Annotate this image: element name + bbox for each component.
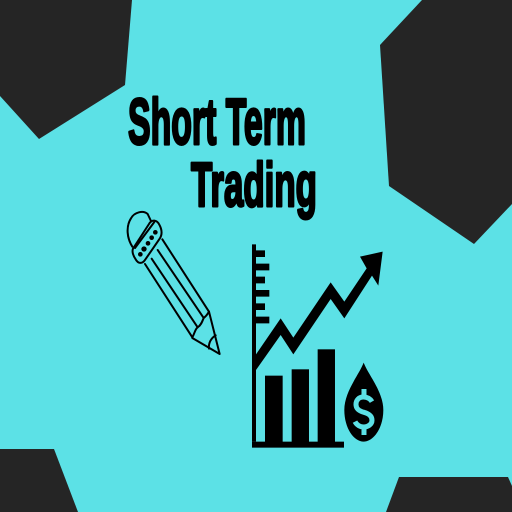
dark shape: bottom left <box>0 449 78 512</box>
pencil eraser <box>128 212 151 247</box>
dark shape: bottom right <box>386 477 512 512</box>
trend arrow <box>256 252 383 370</box>
bar 1 <box>265 376 283 442</box>
dark shape: top left <box>0 0 132 139</box>
icon: dollar drop <box>344 363 383 442</box>
pencil point <box>209 335 216 349</box>
pencil ferrule <box>132 221 162 263</box>
title line 1: Short Term <box>128 85 306 158</box>
dark shape: top right <box>380 0 512 244</box>
icon: growth chart <box>252 244 383 448</box>
bar 3 <box>318 349 335 442</box>
horizontal axis <box>252 442 344 448</box>
vertical axis with ticks <box>252 244 269 442</box>
pencil body <box>145 239 209 337</box>
title line 2: Trading <box>191 151 317 220</box>
dollar sign <box>355 389 372 435</box>
pencil tip <box>192 312 220 354</box>
bar 2 <box>292 369 309 442</box>
pencil band <box>192 312 209 337</box>
title <box>128 85 317 220</box>
icon: pencil <box>128 212 220 354</box>
